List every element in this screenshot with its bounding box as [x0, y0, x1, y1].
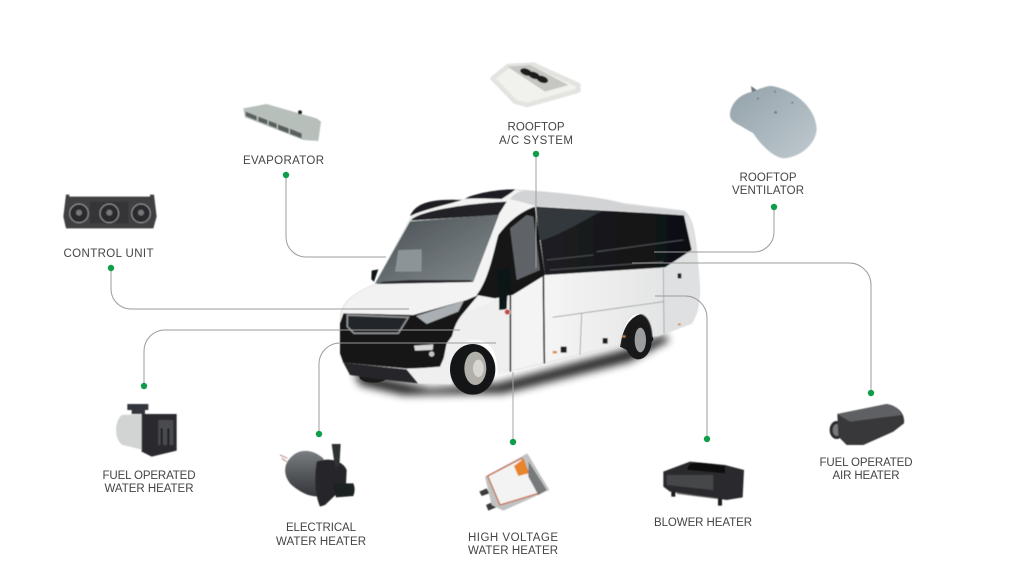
- icon: high voltage water heater: [479, 453, 549, 511]
- icon: blower heater: [663, 462, 744, 506]
- label: rooftop a/c system: A/C SYSTEM: [499, 135, 573, 147]
- rear wheel: [620, 313, 653, 359]
- label: rooftop ventilator: ROOFTOP: [740, 172, 797, 184]
- bus shadow: [353, 335, 670, 395]
- front mask and bumper: [340, 295, 478, 369]
- fog lamp: [414, 344, 433, 351]
- bus body: [341, 190, 700, 384]
- label: electrical water heater: WATER HEATER: [276, 536, 366, 548]
- headlamp: [416, 301, 464, 324]
- connector: fuel operated water heater: [144, 330, 460, 386]
- connector: fuel operated air heater: [632, 263, 871, 393]
- mirrors: [371, 268, 512, 310]
- icon: fuel operated air heater: [830, 404, 904, 445]
- label: evaporator: EVAPORATOR: [243, 155, 324, 167]
- connector: control unit: [111, 268, 409, 309]
- roof band: [510, 191, 688, 217]
- connector: rooftop a/c: [535, 154, 537, 268]
- label: fuel operated water heater: WATER HEATER: [104, 483, 194, 495]
- roof vents: [410, 189, 515, 216]
- label: high voltage water heater: HIGH VOLTAGE: [468, 532, 558, 544]
- label: high voltage water heater: [468, 532, 558, 557]
- windshield: [375, 215, 499, 284]
- door and panel lines: [510, 275, 544, 372]
- grille: [347, 315, 408, 333]
- connector: blower heater: [655, 296, 707, 439]
- side window band: [536, 207, 692, 275]
- icon: rooftop a/c system: [493, 65, 578, 105]
- icon: electrical water heater: [280, 444, 355, 507]
- label: electrical water heater: [276, 522, 366, 548]
- front left wheel: [359, 371, 387, 383]
- white fender: [407, 295, 512, 384]
- icon: evaporator: [243, 104, 321, 141]
- side marks: [561, 273, 681, 353]
- icon: fuel operated water heater: [116, 404, 177, 457]
- label: rooftop a/c system: [499, 122, 573, 147]
- icon: control unit: [63, 195, 157, 228]
- front wheel: [450, 344, 495, 395]
- label: fuel operated air heater: FUEL OPERATED: [820, 457, 912, 469]
- label: fuel operated air heater: [820, 457, 912, 482]
- connector: rooftop ventilator: [654, 207, 774, 252]
- label: blower heater: BLOWER HEATER: [654, 517, 752, 529]
- rear shading: [664, 250, 700, 334]
- label: fuel operated air heater: AIR HEATER: [832, 470, 900, 482]
- door window: [477, 207, 545, 298]
- node dots: [108, 151, 874, 445]
- label: rooftop a/c system: ROOFTOP: [508, 122, 565, 134]
- label: fuel operated water heater: FUEL OPERATED: [102, 470, 196, 482]
- connector: electrical water heater: [319, 343, 496, 434]
- connector: high voltage water heater: [512, 372, 514, 442]
- label: control unit: CONTROL UNIT: [64, 248, 154, 260]
- label: high voltage water heater: WATER HEATER: [468, 545, 558, 557]
- label: rooftop ventilator: VENTILATOR: [732, 185, 804, 197]
- label: rooftop ventilator: [732, 172, 804, 197]
- label: electrical water heater: ELECTRICAL: [286, 522, 357, 534]
- label: fuel operated water heater: [102, 470, 196, 495]
- connector: evaporator: [286, 175, 386, 257]
- icon: rooftop ventilator: [730, 86, 817, 158]
- bus: [340, 189, 700, 395]
- windshield header: [411, 202, 507, 221]
